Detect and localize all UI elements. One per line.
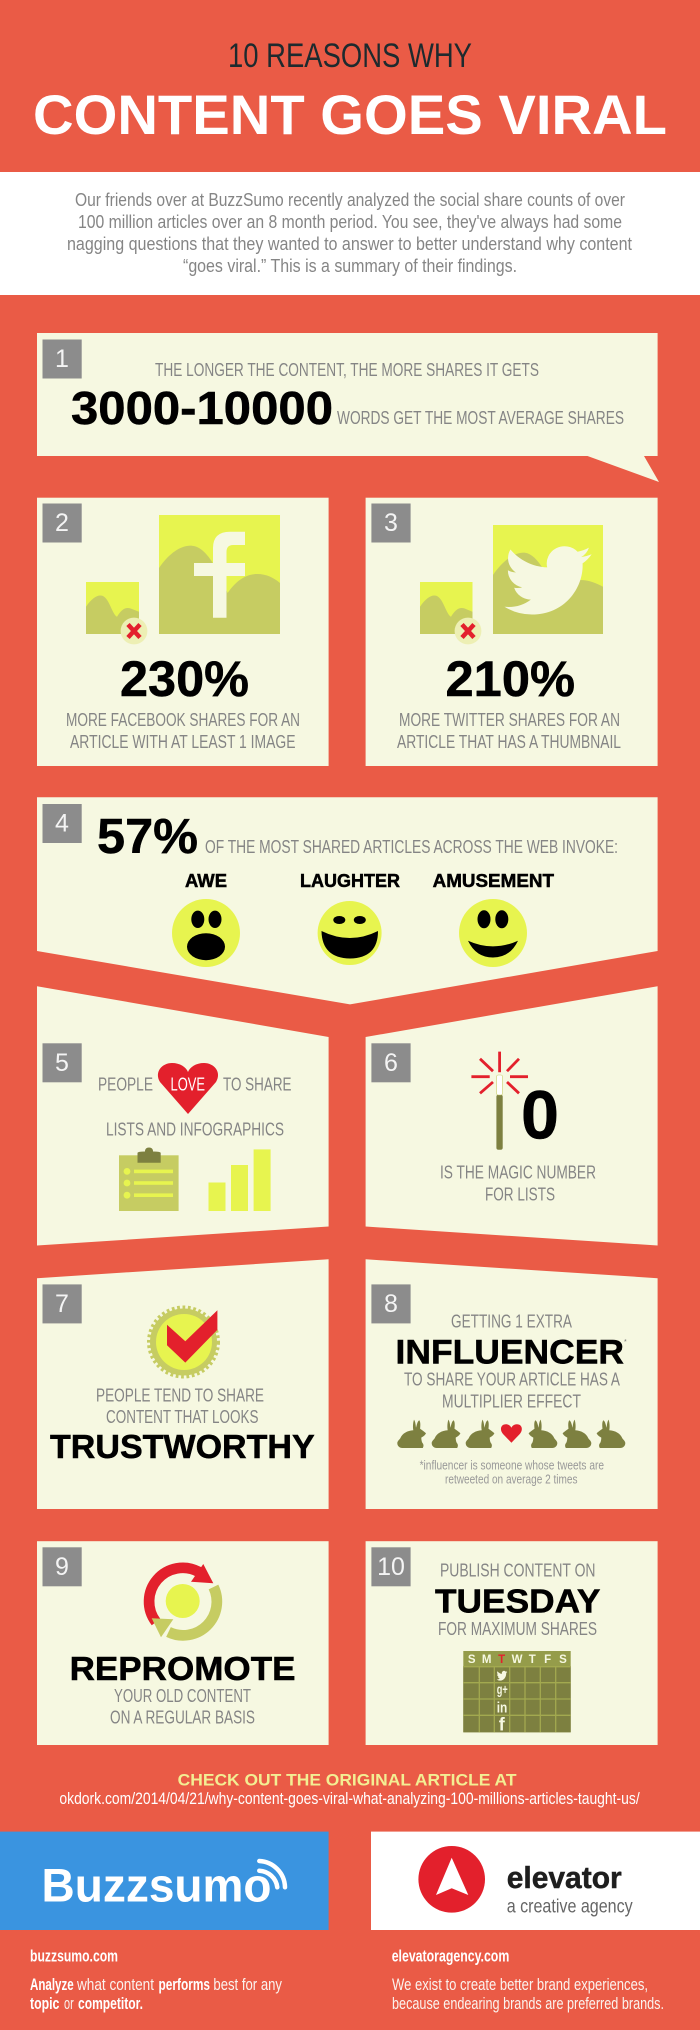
icon: small image <box>420 582 472 634</box>
badge 5: 5 <box>55 1049 69 1077</box>
icon: facebook: f <box>499 1715 506 1735</box>
panel 10: tuesday <box>366 1541 658 1745</box>
keyword: REPROMOTE <box>70 1650 295 1687</box>
caption <box>96 1386 264 1427</box>
stat: 210% <box>446 651 575 707</box>
panel 3: twitter thumbnails <box>366 498 658 766</box>
site: elevatoragency.com <box>392 1948 509 1966</box>
weekday header: W <box>512 1654 523 1666</box>
caption: FOR MAXIMUM SHARES <box>438 1619 597 1639</box>
intro paragraph: 100 million articles over an 8 month period. You see, they've always had some <box>78 212 622 232</box>
description: performs <box>158 1976 210 1994</box>
footnote: *influencer is someone whose tweets are <box>420 1457 604 1472</box>
badge 6: 6 <box>384 1049 398 1077</box>
caption: ARTICLE THAT HAS A THUMBNAIL <box>397 732 621 752</box>
icon: magic wand forming 1 <box>471 1052 528 1150</box>
weekday header: S <box>559 1654 567 1666</box>
statement: THE LONGER THE CONTENT, THE MORE SHARES IT GETS <box>155 360 539 380</box>
weekday header <box>468 1654 567 1666</box>
lead-in: PUBLISH CONTENT ON <box>440 1560 596 1580</box>
icon: google plus: g+ <box>497 1681 508 1697</box>
badge 8 <box>371 1284 411 1323</box>
icon: awe face <box>172 899 240 967</box>
caption <box>110 1686 255 1728</box>
icon: amusement face <box>459 899 527 967</box>
badge 3: 3 <box>384 509 398 537</box>
stat: 230% <box>120 651 249 707</box>
badge 2 <box>42 504 82 542</box>
icon: calendar <box>463 1651 571 1735</box>
caption: FOR LISTS <box>485 1184 555 1204</box>
badge 3 <box>371 504 411 542</box>
wordmark: elevator <box>507 1860 622 1895</box>
badge 9: 9 <box>55 1553 69 1581</box>
description: what content <box>76 1976 154 1994</box>
description: competitor. <box>78 1995 143 2013</box>
emotion labels <box>185 871 554 891</box>
intro band <box>0 172 700 295</box>
badge 4: 4 <box>55 810 69 838</box>
icon: bar chart <box>208 1149 271 1211</box>
caption: MORE FACEBOOK SHARES FOR AN <box>66 710 300 730</box>
caption: IS THE MAGIC NUMBER <box>440 1163 596 1183</box>
intro paragraph <box>67 190 632 276</box>
footer: buzzsumo <box>30 1948 283 2013</box>
logo: buzzsumo <box>0 1832 329 1930</box>
badge 7: 7 <box>55 1290 69 1318</box>
badge 2: 2 <box>55 509 69 537</box>
intro paragraph: Our friends over at BuzzSumo recently analyzed the social share counts of over <box>75 190 625 210</box>
title line 2: CONTENT GOES VIRAL <box>33 83 667 146</box>
icon: red x <box>121 618 147 644</box>
badge 5 <box>42 1043 82 1082</box>
intro paragraph: nagging questions that they wanted to answer to better understand why content <box>67 234 632 254</box>
weekday header: S <box>468 1654 476 1666</box>
emotion labels: AWE <box>185 871 227 891</box>
description: best for any <box>213 1976 283 1994</box>
caption <box>440 1163 596 1204</box>
badge 8: 8 <box>384 1290 398 1318</box>
icon: seal with check <box>150 1308 218 1376</box>
panel 8: influencer <box>366 1259 658 1509</box>
icon: laughter face <box>318 901 382 965</box>
lead-in: GETTING 1 EXTRA <box>451 1311 572 1331</box>
weekday header: T <box>529 1654 536 1666</box>
header <box>33 37 667 146</box>
caption: PEOPLE TEND TO SHARE <box>96 1386 264 1406</box>
icon: heart with love: LOVE <box>170 1074 205 1094</box>
caption <box>404 1370 620 1411</box>
icon: red x <box>455 618 481 644</box>
badge 4 <box>42 804 82 843</box>
logo: buzzsumo: Buzzsumo <box>42 1859 272 1912</box>
badge 1: 1 <box>55 345 69 373</box>
icon: large image with twitter bird <box>493 525 603 634</box>
description: Analyze <box>30 1976 74 1994</box>
caption: ARTICLE WITH AT LEAST 1 IMAGE <box>70 732 296 752</box>
icon: clipboard <box>119 1148 179 1211</box>
icon: large image with facebook f <box>159 515 280 634</box>
big zero: 0 <box>521 1076 559 1154</box>
caption: TO SHARE YOUR ARTICLE HAS A <box>404 1370 620 1390</box>
caption: CONTENT THAT LOOKS <box>106 1407 258 1427</box>
icon: recycle arrows <box>149 1564 217 1637</box>
description: or <box>64 1995 74 2013</box>
emotion labels: LAUGHTER <box>300 871 400 891</box>
caption: ON A REGULAR BASIS <box>110 1708 255 1728</box>
icon: signal arcs <box>259 1861 285 1887</box>
statement right: TO SHARE <box>223 1074 292 1094</box>
heading: CHECK OUT THE ORIGINAL ARTICLE AT <box>178 1771 517 1790</box>
badge 10 <box>371 1547 411 1586</box>
panel 4: emotions <box>37 797 658 1004</box>
panel 7: trustworthy <box>37 1259 329 1509</box>
logo: elevator <box>371 1832 700 1930</box>
footnote <box>420 1457 604 1486</box>
description <box>392 1976 664 2013</box>
caption <box>66 710 300 752</box>
keyword: TRUSTWORTHY <box>50 1428 315 1465</box>
panel 5: lists and infographics <box>37 986 329 1246</box>
icon: twitter <box>497 1671 507 1681</box>
badge 1 <box>42 340 82 378</box>
footnote: retweeted on average 2 times <box>445 1471 578 1486</box>
panel 6: magic number <box>366 986 658 1246</box>
site: buzzsumo.com <box>30 1948 118 1966</box>
icon: rabbits and heart <box>397 1420 625 1448</box>
weekday header: F <box>544 1654 551 1666</box>
badge 10: 10 <box>377 1553 405 1581</box>
description <box>30 1976 283 2013</box>
emotion labels: AMUSEMENT <box>433 871 554 891</box>
footer: elevator <box>392 1948 664 2013</box>
icon: small image <box>86 582 139 634</box>
panel 1: content length <box>37 333 659 482</box>
intro paragraph: “goes viral.” This is a summary of their findings. <box>183 256 517 276</box>
call to action <box>59 1771 640 1808</box>
icon: heart with love <box>158 1063 218 1114</box>
weekday header: M <box>482 1654 491 1666</box>
caption <box>397 710 621 752</box>
title line 1: 10 REASONS WHY <box>228 37 472 75</box>
keyword: * <box>624 1339 627 1346</box>
panel 2: facebook images <box>37 498 329 766</box>
icon: linkedin: in <box>497 1700 507 1717</box>
tagline: a creative agency <box>507 1897 633 1918</box>
statement left: PEOPLE <box>98 1074 153 1094</box>
stat: 57% <box>97 810 198 864</box>
big number: 3000-10000 <box>71 382 333 434</box>
caption: YOUR OLD CONTENT <box>114 1686 251 1706</box>
badge 6 <box>371 1043 411 1082</box>
caption: MULTIPLIER EFFECT <box>442 1391 581 1411</box>
keyword: TUESDAY <box>435 1583 600 1620</box>
caption: MORE TWITTER SHARES FOR AN <box>399 710 620 730</box>
badge 7 <box>42 1284 82 1323</box>
description: topic <box>30 1995 59 2013</box>
badge 9 <box>42 1547 82 1586</box>
icon: red circle arrow <box>418 1846 485 1913</box>
panel 9: repromote <box>37 1541 329 1745</box>
statement second line: LISTS AND INFOGRAPHICS <box>106 1119 284 1139</box>
keyword: INFLUENCER <box>396 1334 624 1372</box>
weekday header: T <box>498 1654 505 1666</box>
